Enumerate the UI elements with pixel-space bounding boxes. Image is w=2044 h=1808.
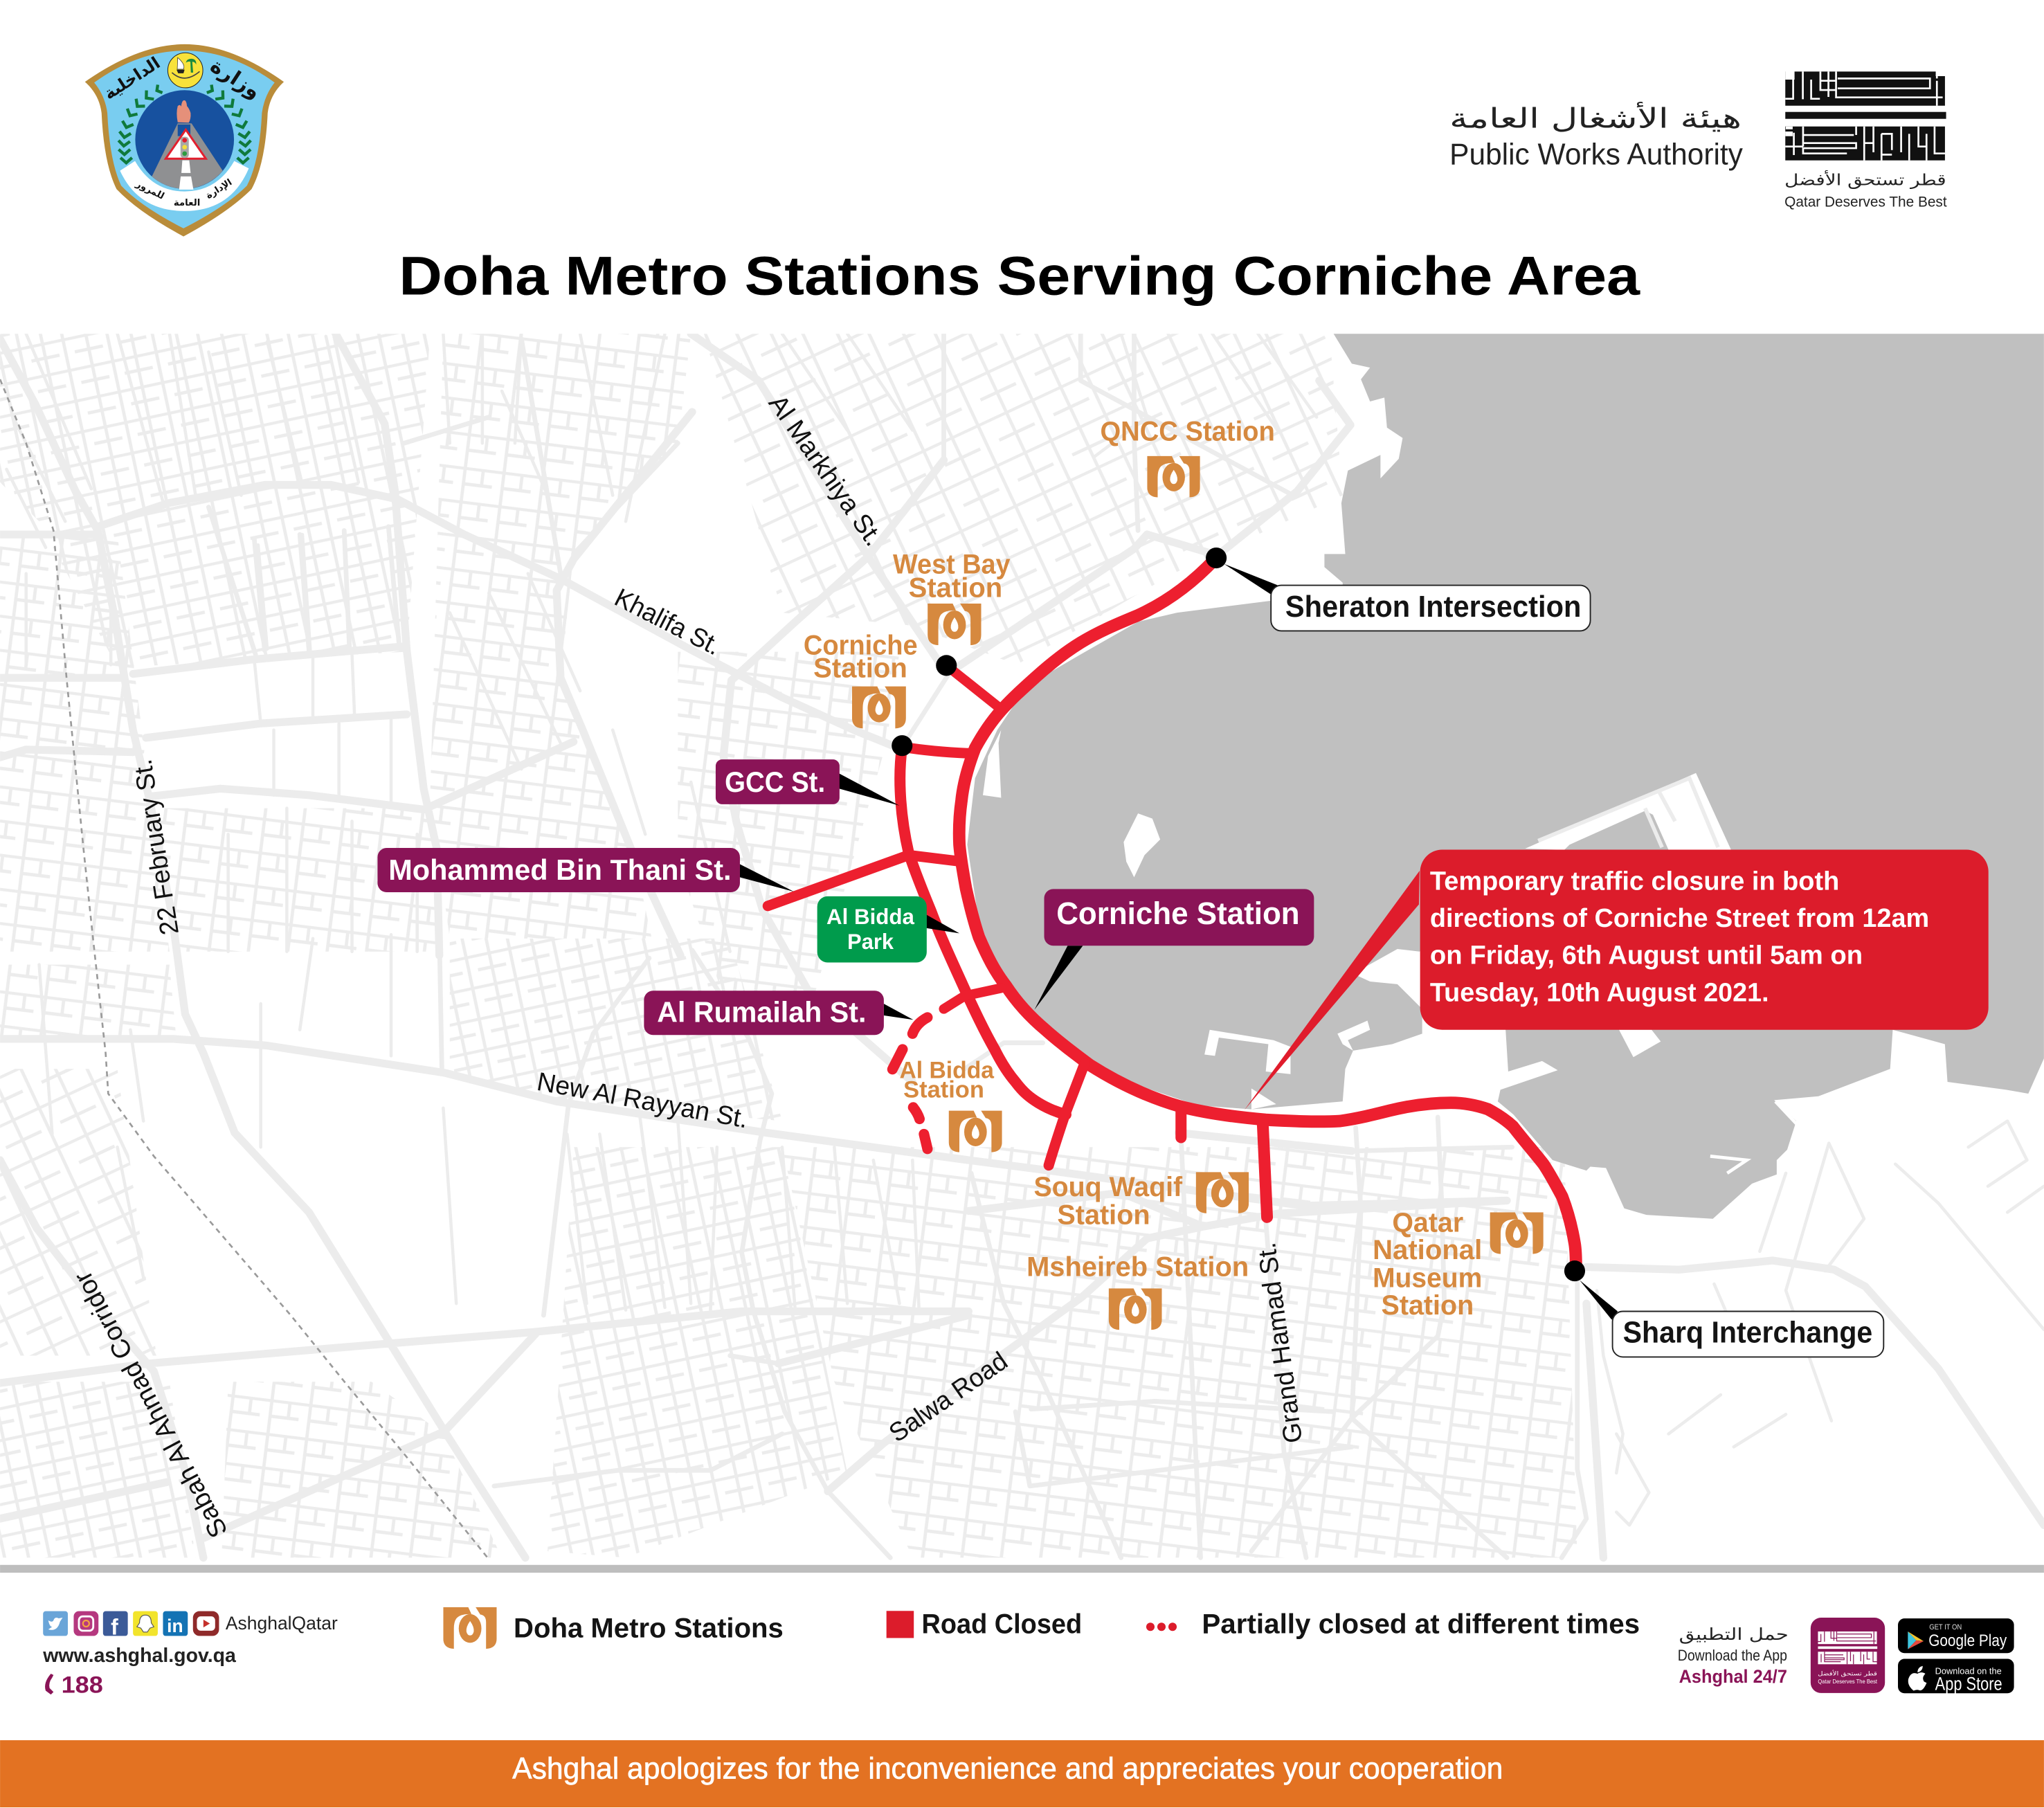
app download block: Ashghal 24/7 [1679, 1666, 1787, 1687]
port [1525, 773, 1731, 850]
station: West Bay [893, 550, 1011, 645]
callout: red closure notice: Tuesday, 10th August 2021. [1430, 977, 1769, 1006]
label: Mohammed Bin Thani St.: Mohammed Bin Thani St. [388, 853, 732, 886]
icon: Ashghal app [1811, 1618, 1885, 1693]
station: West Bay: West Bay [893, 550, 1011, 580]
station: Al Bidda: Al Bidda [899, 1057, 995, 1083]
street labels [68, 389, 1308, 1543]
badge: App Store: App Store [1935, 1674, 2002, 1694]
label: Sharq Interchange [1580, 1280, 1883, 1357]
street labels: Al Markhiya St. [763, 389, 889, 551]
callout: red closure notice: on Friday, 6th August until 5am on [1430, 941, 1863, 970]
label: Corniche Station: Corniche Station [1056, 896, 1300, 931]
street labels: Sabah Al Ahmad Corridor [68, 1267, 233, 1543]
station: Souq Waqif [1033, 1172, 1249, 1230]
station: Corniche [804, 630, 918, 728]
label: Al Bidda Park: Park [847, 930, 894, 954]
app download block: Download the App [1678, 1647, 1787, 1664]
callout: red closure notice: directions of Corniche Street from 12am [1430, 903, 1929, 932]
logo: Public Works Authority wordmark: هيئة الأشغال العامة [1449, 102, 1742, 135]
closed roads (red) [768, 559, 1576, 1267]
crest: traffic department emblem: الداخلية [100, 53, 163, 104]
legend: Doha Metro Stations [443, 1607, 784, 1649]
street network [0, 332, 2044, 1557]
icon: Ashghal app: Qatar Deserves The Best [1818, 1678, 1878, 1685]
social icons and contact [42, 1611, 338, 1698]
label: GCC St. [716, 759, 899, 806]
badge: App Store [1898, 1659, 2014, 1694]
street labels: Grand Hamad St. [1251, 1241, 1308, 1445]
label: Mohammed Bin Thani St. [377, 848, 794, 892]
station: Al Bidda [899, 1057, 1002, 1152]
app download block: حمل التطبيق [1679, 1625, 1789, 1644]
station: Qatar National Museum: National [1373, 1235, 1482, 1265]
social icons and contact: www.ashghal.gov.qa [42, 1644, 236, 1666]
station: Corniche: Station [813, 653, 907, 683]
label: Sheraton Intersection: Sheraton Intersection [1285, 590, 1581, 624]
station: Qatar National Museum [1373, 1208, 1544, 1321]
icon: Ashghal app: قطر تستحق الأفضل [1818, 1670, 1877, 1676]
legend: Partially closed: Partially closed at different times [1202, 1609, 1640, 1640]
logo: Ashghal: Qatar Deserves The Best [1784, 192, 1947, 210]
callout: red closure notice [1245, 849, 1989, 1110]
land: coastal structures [983, 730, 1731, 1110]
crest: traffic department emblem: للمرور [134, 179, 166, 202]
badge: Google Play: GET IT ON [1929, 1623, 1962, 1631]
legend: Road Closed: Road Closed [921, 1609, 1082, 1640]
logo: Ashghal [1784, 71, 1947, 210]
social icons and contact: AshghalQatar [226, 1613, 338, 1634]
street labels: Salwa Road [883, 1346, 1013, 1447]
station: Msheireb [1026, 1252, 1249, 1330]
station: West Bay: Station [909, 573, 1002, 604]
logo: Ashghal: قطر تستحق الأفضل [1784, 170, 1946, 189]
crest: traffic department emblem: الإدارة [204, 177, 234, 201]
map panel [0, 332, 2044, 1557]
label: Al Bidda Park: Al Bidda [826, 905, 915, 929]
title: Doha Metro Stations Serving Corniche Area [399, 245, 1640, 307]
station: Qatar National Museum: Station [1382, 1290, 1474, 1321]
badge: Google Play [1898, 1618, 2014, 1653]
dense city blocks texture [0, 334, 1577, 1557]
station: QNCC: QNCC Station [1100, 417, 1275, 447]
social icons and contact: f [111, 1615, 118, 1640]
logo: Public Works Authority wordmark: Public Works Authority [1449, 138, 1743, 171]
label: Corniche Station [1034, 889, 1314, 1010]
label: Sharq Interchange: Sharq Interchange [1623, 1317, 1872, 1350]
street labels: Khalifa St. [611, 583, 725, 660]
partially closed dashed road [892, 1018, 928, 1149]
crest: traffic department emblem: العامة [174, 198, 200, 208]
Al Bidda cross streets [1049, 1064, 1085, 1166]
street labels: 22 February St. [127, 757, 184, 937]
street labels: New Al Rayyan St. [535, 1067, 750, 1133]
Corniche Street main closure [959, 559, 1576, 1267]
dashed metro alignment line [0, 379, 487, 1557]
label: Sheraton Intersection [1224, 564, 1591, 631]
GCC Street closure [900, 747, 1066, 1114]
badge: App Store: Download on the [1935, 1666, 2002, 1676]
station: Souq Waqif: Station [1057, 1200, 1150, 1230]
logo: Public Works Authority wordmark [1449, 102, 1743, 171]
station: Qatar National Museum: Museum [1373, 1263, 1482, 1294]
social icons and contact: 188 [62, 1672, 103, 1698]
callout: red closure notice: Temporary traffic closure in both [1430, 866, 1839, 895]
label: Al Rumailah St. [644, 991, 913, 1035]
station: Msheireb: Msheireb Station [1026, 1252, 1249, 1283]
label: Al Rumailah St.: Al Rumailah St. [657, 995, 866, 1028]
divider band [0, 1565, 2044, 1573]
legend: Doha Metro Stations: Doha Metro Stations [514, 1613, 784, 1643]
station: QNCC [1100, 417, 1275, 497]
footer band: Ashghal apologizes for the inconvenience and appreciates your cooperation [512, 1753, 1503, 1786]
label: GCC St.: GCC St. [725, 766, 825, 798]
station: Qatar National Museum: Qatar [1392, 1208, 1463, 1238]
label: Al Bidda Park [817, 896, 959, 963]
island in bay [1123, 813, 1160, 877]
app download block [1678, 1618, 2014, 1694]
social icons and contact: in [167, 1616, 183, 1636]
station: Corniche: Corniche [804, 630, 918, 660]
marker dots [892, 548, 1585, 1281]
station: Souq Waqif: Souq Waqif [1033, 1172, 1183, 1202]
station: Al Bidda: Station [903, 1077, 984, 1103]
water: bay [967, 334, 2044, 1219]
footer band [0, 1740, 2044, 1807]
crest: traffic department emblem: وزارة [206, 53, 265, 103]
badge: Google Play: Google Play [1928, 1631, 2007, 1650]
crest: traffic department emblem [85, 44, 284, 237]
